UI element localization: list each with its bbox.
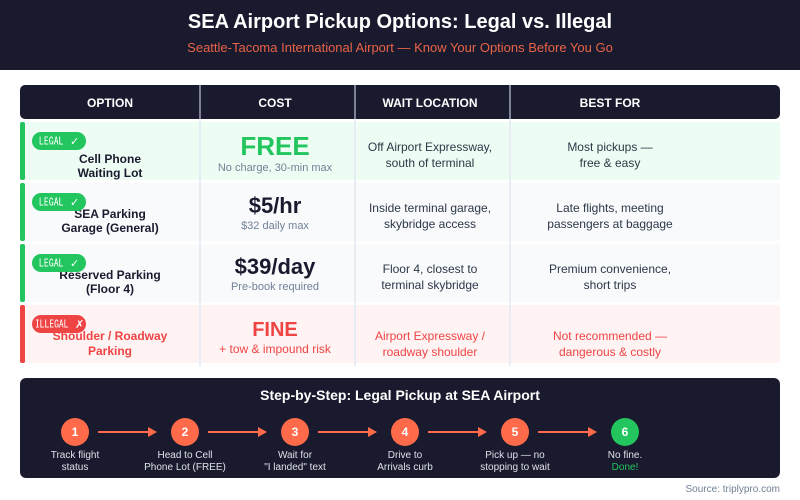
step 3: "I landed" text	[264, 462, 326, 473]
arrow 4	[428, 427, 487, 437]
badge: legal row 1	[32, 132, 86, 150]
table header: OPTION	[87, 96, 133, 110]
badge: legal row 1: LEGAL	[39, 136, 64, 147]
row: reserved parking: terminal skybridge	[381, 278, 479, 292]
badge: legal row 2: ✓	[70, 196, 79, 209]
row: reserved parking: Premium convenience,	[549, 262, 671, 276]
badge: legal row 2	[32, 193, 86, 211]
row: general garage: skybridge access	[384, 217, 476, 231]
badge: legal row 3: LEGAL	[39, 258, 64, 269]
row: general garage: passengers at baggage	[547, 217, 673, 231]
badge: illegal row 4: ✗	[75, 318, 84, 331]
row: cell phone lot: No charge, 30-min max	[218, 162, 333, 174]
step 1: Track flight	[51, 450, 99, 461]
step 5: 5	[512, 425, 519, 439]
row: general garage: Garage (General)	[61, 221, 159, 235]
badge: illegal row 4: ILLEGAL	[35, 319, 68, 330]
arrow 3	[318, 427, 377, 437]
row: cell phone lot: free & easy	[580, 156, 640, 170]
step 2	[144, 418, 226, 473]
step 4: Arrivals curb	[377, 462, 433, 473]
row: shoulder parking: Airport Expressway /	[375, 329, 486, 343]
step 3	[264, 418, 326, 473]
row: reserved parking: (Floor 4)	[86, 282, 134, 296]
row: general garage: $5/hr	[249, 193, 302, 218]
badge: legal row 3: ✓	[70, 257, 79, 270]
row: cell phone lot: Waiting Lot	[78, 166, 142, 180]
step 4: Drive to	[388, 450, 423, 461]
step 2: Phone Lot (FREE)	[144, 462, 226, 473]
step 2: 2	[182, 425, 189, 439]
table header: WAIT LOCATION	[382, 96, 478, 110]
arrow 2	[208, 427, 267, 437]
row: cell phone lot: Off Airport Expressway,	[368, 140, 492, 154]
row: general garage	[20, 183, 780, 241]
badge: legal row 2: LEGAL	[39, 197, 64, 208]
table header	[20, 85, 780, 119]
row: reserved parking: $39/day	[235, 254, 316, 279]
step 6: No fine.	[608, 450, 642, 461]
panel heading: Step-by-Step: Legal Pickup at SEA Airport	[260, 387, 540, 403]
row: cell phone lot: Most pickups —	[567, 140, 653, 154]
source note: Source: triplypro.com	[686, 484, 780, 495]
column dividers	[199, 85, 511, 366]
row: cell phone lot: south of terminal	[386, 156, 474, 170]
table header: COST	[258, 96, 292, 110]
step 2: Head to Cell	[157, 450, 213, 461]
row: shoulder parking	[20, 305, 780, 363]
title: SEA Airport Pickup Options: Legal vs. Illegal	[188, 11, 612, 33]
table header: BEST FOR	[580, 96, 641, 110]
row: shoulder parking: Parking	[88, 344, 132, 358]
step 1: 1	[72, 425, 79, 439]
row: reserved parking: short trips	[584, 278, 636, 292]
row: shoulder parking: + tow & impound risk	[219, 342, 332, 356]
row: cell phone lot	[20, 122, 780, 180]
step 6	[608, 418, 642, 473]
step 6: Done!	[612, 462, 638, 473]
row: shoulder parking: Shoulder / Roadway	[53, 329, 168, 343]
step 5	[480, 418, 550, 473]
row: shoulder parking: dangerous & costly	[559, 345, 661, 359]
arrow 5	[538, 427, 597, 437]
step 3: 3	[292, 425, 299, 439]
row: shoulder parking: FINE	[252, 319, 298, 341]
row: shoulder parking: Not recommended —	[553, 329, 667, 343]
row: general garage: Late flights, meeting	[556, 201, 664, 215]
row: reserved parking: Floor 4, closest to	[383, 262, 478, 276]
row: general garage: $32 daily max	[241, 220, 309, 232]
row: cell phone lot: FREE	[240, 131, 310, 161]
row: reserved parking	[20, 244, 780, 302]
row: shoulder parking: roadway shoulder	[383, 345, 477, 359]
arrow 1	[98, 427, 157, 437]
subtitle: Seattle-Tacoma International Airport — Know Your Options Before You Go	[187, 40, 613, 55]
row: reserved parking: Pre-book required	[231, 281, 319, 293]
row: reserved parking: Reserved Parking	[59, 268, 161, 282]
panel: step by step	[20, 378, 780, 478]
step 5: stopping to wait	[480, 462, 550, 473]
step 4	[377, 418, 433, 473]
row: cell phone lot: Cell Phone	[79, 152, 141, 166]
step 3: Wait for	[278, 450, 313, 461]
step 1	[51, 418, 99, 473]
badge: legal row 3	[32, 254, 86, 272]
row: general garage: SEA Parking	[74, 207, 146, 221]
step 1: status	[62, 462, 88, 473]
row: general garage: Inside terminal garage,	[369, 201, 491, 215]
step 5: Pick up — no	[485, 450, 545, 461]
step 4: 4	[402, 425, 409, 439]
step 6: 6	[622, 425, 629, 439]
badge: legal row 1: ✓	[70, 135, 79, 148]
header banner	[0, 0, 800, 70]
badge: illegal row 4	[32, 315, 86, 333]
